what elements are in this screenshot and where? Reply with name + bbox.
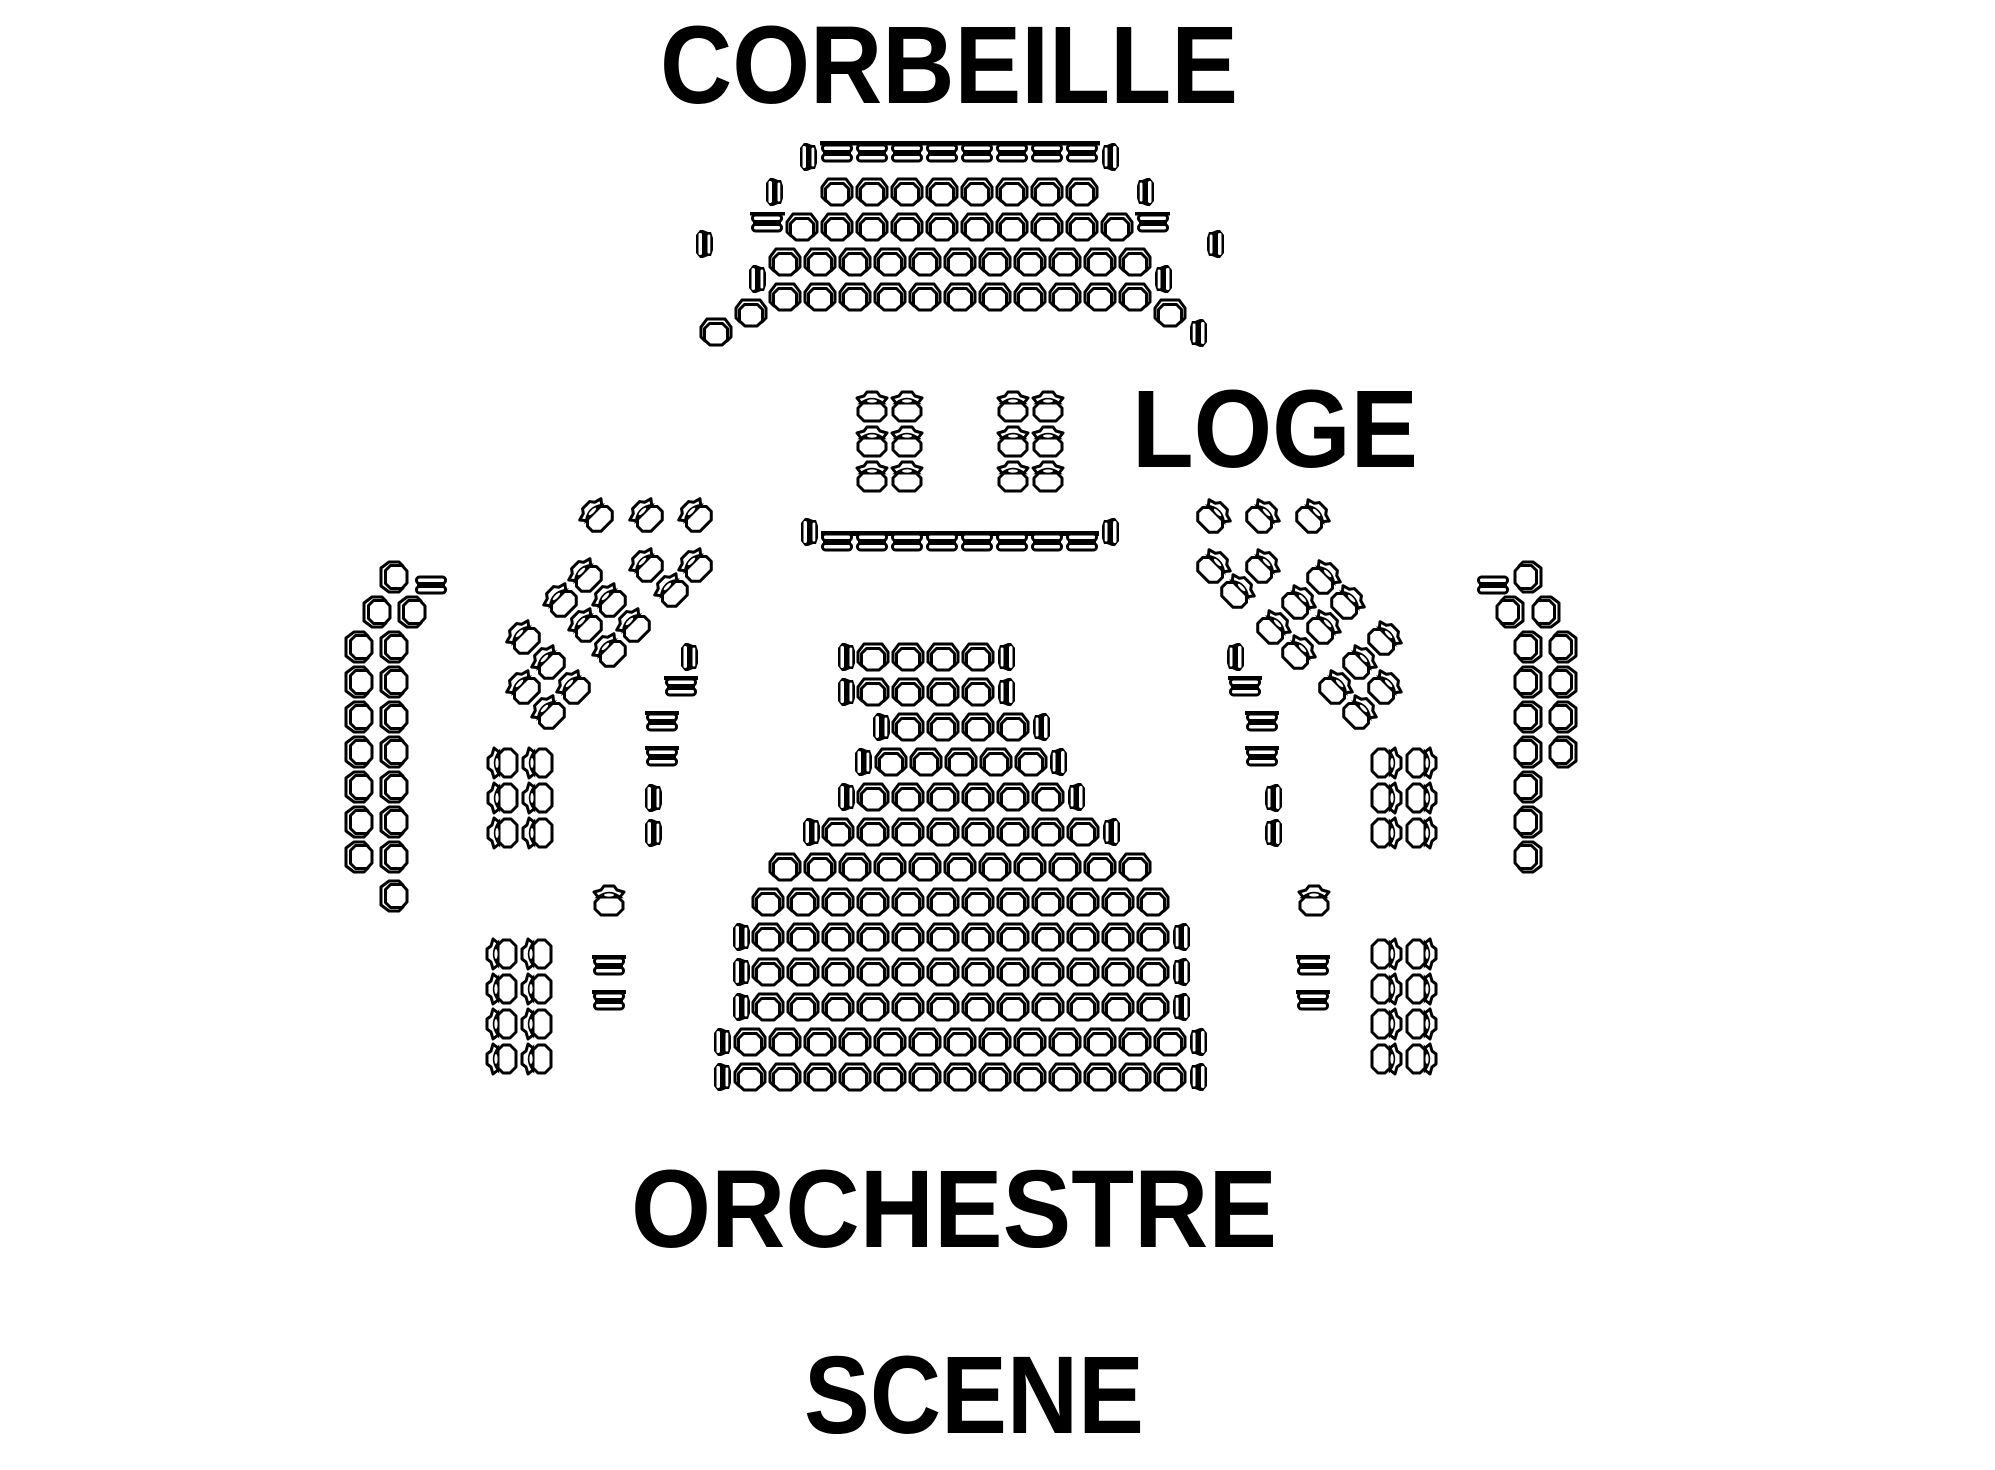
corbeille row 1 with bar bbox=[800, 141, 1119, 171]
orchestre row 5 bbox=[838, 783, 1085, 811]
heading: ORCHESTRE: ORCHESTRE bbox=[631, 1148, 1277, 1271]
title: CORBEILLE: CORBEILLE bbox=[660, 4, 1238, 127]
loge right block bbox=[998, 392, 1063, 491]
panel: left loge diagonal seats bbox=[502, 494, 716, 733]
corbeille row 4 bbox=[696, 230, 1224, 275]
panel: far left balcony column bbox=[346, 562, 446, 911]
orchestre rows 1 to 2 bbox=[838, 643, 1015, 706]
loge left block bbox=[857, 392, 922, 491]
corbeille end seats bbox=[701, 300, 1207, 347]
panel: right side aisle seats bbox=[1227, 643, 1330, 1009]
panel: left side boxes bbox=[487, 748, 552, 1074]
corbeille row 3 bbox=[750, 212, 1170, 240]
heading: LOGE: LOGE bbox=[1132, 368, 1418, 491]
panel: loge centre seating bbox=[801, 392, 1119, 550]
corbeille row 2 bbox=[766, 178, 1154, 206]
orchestre row 4 bbox=[855, 748, 1067, 776]
orchestre row 9 bbox=[733, 923, 1190, 951]
panel: corbeille seating bbox=[696, 141, 1224, 347]
orchestre row 7 bbox=[770, 854, 1150, 880]
loge front row with bar bbox=[801, 518, 1119, 550]
heading: SCENE: SCENE bbox=[804, 1334, 1144, 1457]
panel: right side boxes bbox=[1372, 748, 1436, 1074]
orchestre row 11 bbox=[733, 993, 1190, 1021]
orchestre row 10 bbox=[733, 958, 1190, 986]
panel: left side aisle seats bbox=[592, 643, 698, 1009]
corbeille row 5 bbox=[749, 265, 1172, 310]
orchestre row 13 bbox=[714, 1063, 1207, 1091]
orchestre row 6 bbox=[803, 818, 1120, 846]
panel: far right balcony column bbox=[1478, 562, 1576, 872]
panel: right loge diagonal seats bbox=[1193, 495, 1406, 733]
orchestre row 12 bbox=[714, 1028, 1207, 1056]
panel: orchestre centre seating bbox=[714, 643, 1207, 1091]
orchestre row 3 bbox=[873, 713, 1050, 741]
orchestre row 8 bbox=[753, 889, 1168, 915]
